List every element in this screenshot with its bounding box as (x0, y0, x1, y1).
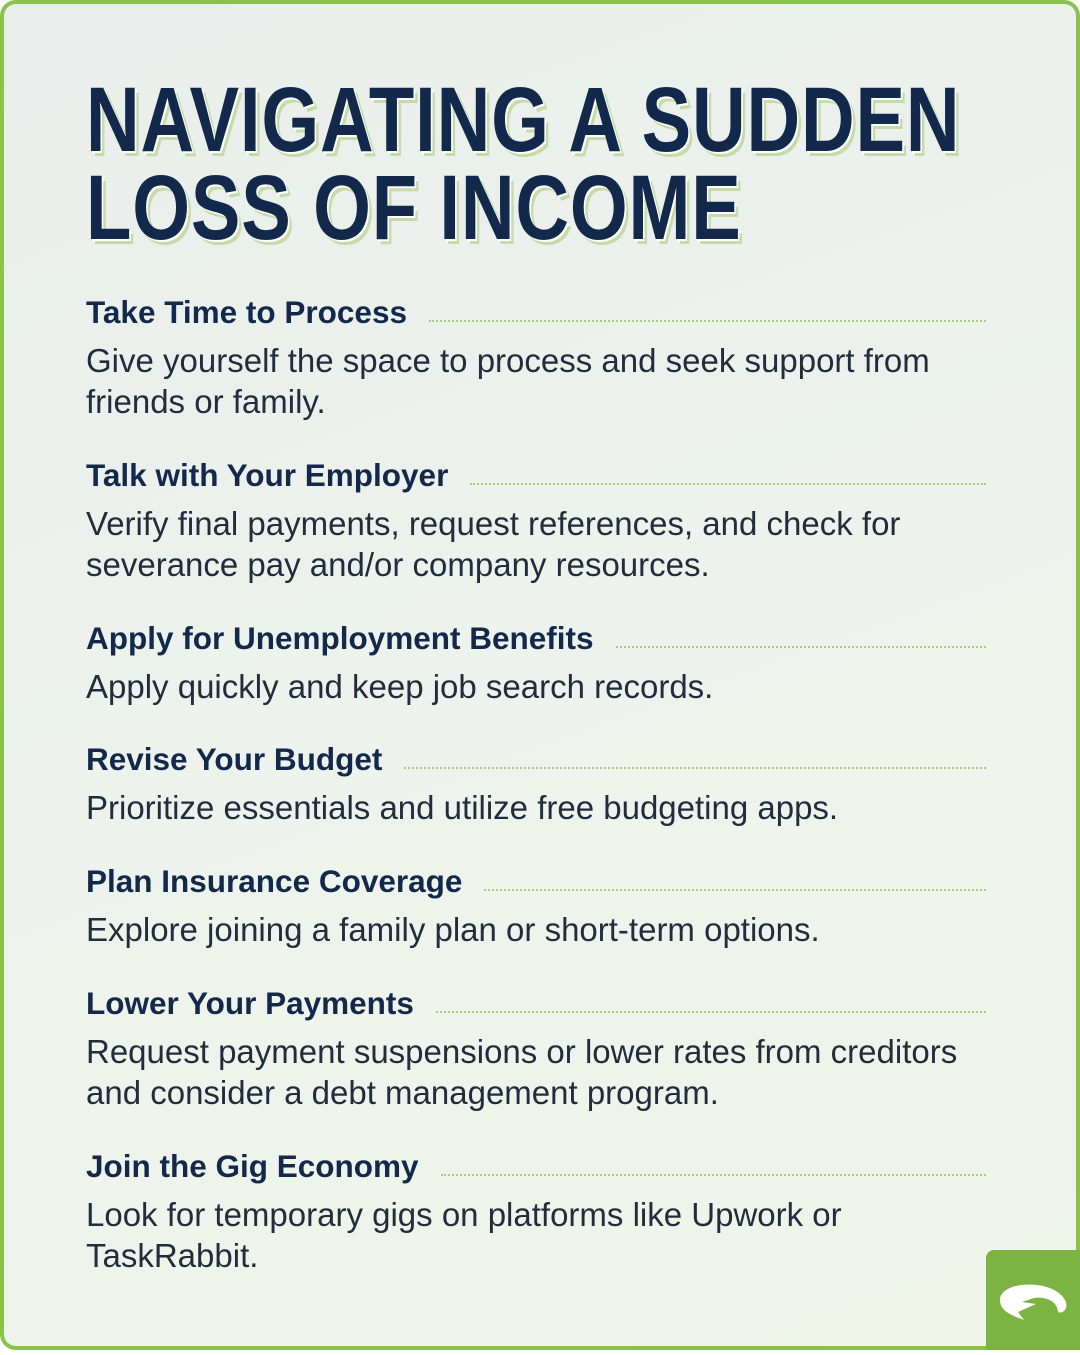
section: gig economy: Join the Gig Economy (86, 1148, 419, 1184)
section: revise budget: Revise Your Budget (86, 740, 382, 776)
section: lower payments: Lower Your Payments (86, 984, 414, 1020)
section: revise budget (86, 740, 986, 826)
title: NAVIGATING A SUDDEN (86, 69, 960, 171)
title: LOSS OF INCOME (86, 157, 742, 259)
section: insurance: Explore joining a family plan or short-term options. (86, 911, 820, 948)
logo (986, 1250, 1080, 1350)
section: talk with your employer: Talk with Your Employer (86, 456, 448, 492)
section: talk with your employer: Verify final payments, request references, and check for (86, 505, 900, 542)
section: insurance: Plan Insurance Coverage (86, 862, 462, 898)
section: lower payments (86, 984, 986, 1111)
section: take time to process: Take Time to Process (86, 294, 407, 330)
title (86, 69, 960, 259)
section: insurance (86, 862, 986, 948)
section: gig economy: TaskRabbit. (86, 1237, 258, 1274)
section: lower payments: Request payment suspensions or lower rates from creditors (86, 1033, 957, 1070)
section: revise budget: Prioritize essentials and utilize free budgeting apps. (86, 789, 838, 826)
section: gig economy: Look for temporary gigs on platforms like Upwork or (86, 1196, 842, 1233)
section: lower payments: and consider a debt management program. (86, 1074, 719, 1111)
section: gig economy (86, 1148, 986, 1274)
section: talk with your employer (86, 456, 986, 583)
section: take time to process: friends or family. (86, 383, 326, 420)
section: take time to process: Give yourself the space to process and seek support from (86, 342, 930, 379)
section: take time to process (86, 294, 986, 420)
section: talk with your employer: severance pay and/or company resources. (86, 546, 710, 583)
section: unemployment benefits (86, 620, 986, 705)
section: unemployment benefits: Apply for Unemployment Benefits (86, 620, 594, 656)
section: unemployment benefits: Apply quickly and keep job search records. (86, 668, 713, 705)
